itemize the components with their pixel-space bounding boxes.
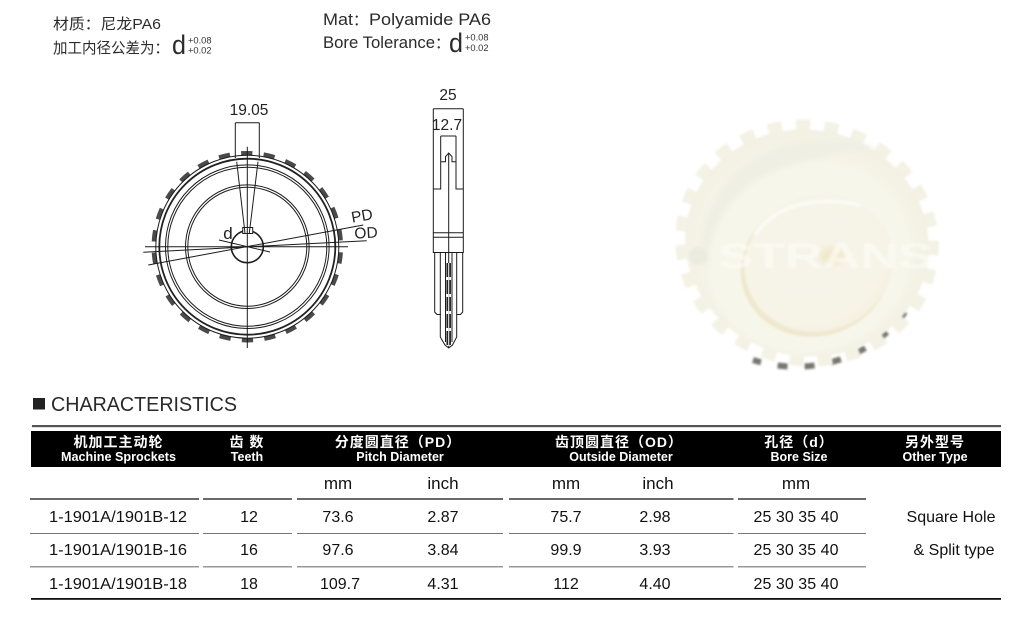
specification table — [30, 425, 1001, 600]
sprocket body with teeth — [661, 104, 953, 382]
column header: other type: 另外型号 — [905, 434, 965, 450]
other type note: Square Hole — [907, 509, 996, 526]
other type note: & Split type — [914, 542, 995, 559]
material note: Chinese — [53, 16, 212, 60]
column header: other type: Other Type — [902, 450, 968, 464]
row: 18 teeth: 112 — [553, 576, 579, 593]
column header: bore size — [764, 434, 834, 464]
row: 12 teeth: 73.6 — [322, 509, 354, 526]
center and diameter lines — [143, 147, 367, 348]
label: d: d — [223, 224, 233, 243]
material note: English: +0.08 — [465, 32, 489, 42]
column header: pitch diameter: 分度圆直径（PD） — [335, 434, 461, 450]
material note: Chinese: 加工内径公差为： — [53, 40, 169, 57]
column header: bore size: 孔径（d） — [764, 434, 834, 450]
column header: teeth — [230, 434, 264, 464]
row: 18 teeth: 25 30 35 40 — [754, 576, 839, 593]
label: OD: OD — [354, 224, 378, 243]
width dimension 25 — [433, 87, 463, 109]
material note: English: ： — [353, 12, 368, 29]
label: PD: PD — [350, 206, 374, 227]
product photo: white nylon sprocket — [661, 104, 953, 387]
hub highlight — [755, 201, 860, 235]
row: 18 teeth: 1-1901A/1901B-18 — [49, 576, 187, 593]
material note: English: +0.02 — [465, 43, 489, 53]
row: 16 teeth — [49, 542, 839, 559]
unit row: mm — [324, 474, 352, 493]
column header: machine sprockets: Machine Sprockets — [61, 450, 176, 464]
shadow under lower teeth — [753, 312, 905, 367]
pitch dimension 19.05: 19.05 — [230, 102, 268, 119]
upper shaded band — [700, 139, 880, 270]
material note: Chinese: d — [172, 30, 186, 60]
row: 12 teeth: 75.7 — [550, 509, 582, 526]
material note: English: ： — [435, 35, 450, 52]
column header: machine sprockets: 机加工主动轮 — [74, 434, 164, 450]
tooth chain — [446, 263, 451, 346]
row: 16 teeth: 3.84 — [427, 542, 459, 559]
column header: bore size: Bore Size — [771, 450, 828, 464]
sprocket teeth — [154, 153, 341, 340]
row: 18 teeth: 18 — [240, 576, 258, 593]
row: 16 teeth: 97.6 — [322, 542, 354, 559]
watermark — [689, 237, 933, 276]
row: 18 teeth: 4.40 — [639, 576, 671, 593]
material note: English: Polyamide PA6 — [369, 10, 491, 29]
row: 16 teeth: 16 — [240, 542, 258, 559]
raised ring — [677, 129, 943, 387]
width dimension 25: 25 — [439, 87, 457, 104]
side view drawing of sprocket — [432, 87, 463, 348]
material note: English: d — [449, 28, 463, 58]
watermark: STRANS — [718, 237, 933, 276]
column header: outside diameter: Outside Diameter — [569, 450, 673, 464]
width dimension 12.7: 12.7 — [432, 117, 462, 134]
row: 12 teeth: 2.98 — [639, 509, 671, 526]
row: 18 teeth: 109.7 — [320, 576, 360, 593]
material note: Chinese: +0.02 — [188, 46, 212, 56]
column header: machine sprockets — [61, 434, 176, 464]
row: 16 teeth: 99.9 — [550, 542, 582, 559]
row: 16 teeth: 1-1901A/1901B-16 — [49, 542, 187, 559]
material note: Chinese: +0.08 — [188, 36, 212, 46]
row: 12 teeth: 12 — [240, 509, 258, 526]
unit row: mm — [552, 474, 580, 493]
hub — [721, 173, 913, 358]
unit row: inch — [642, 474, 674, 493]
material note: Chinese: 材质：尼龙PA6 — [53, 16, 161, 33]
column header: pitch diameter — [335, 434, 461, 464]
material note: English: Mat — [323, 10, 353, 29]
row: 12 teeth: 1-1901A/1901B-12 — [49, 509, 187, 526]
row: 16 teeth: 25 30 35 40 — [754, 542, 839, 559]
row: 16 teeth: 3.93 — [639, 542, 671, 559]
row: 18 teeth — [49, 576, 839, 593]
table header band — [31, 431, 1001, 467]
column header: outside diameter: 齿顶圆直径（OD） — [555, 434, 683, 450]
column header: outside diameter — [555, 434, 683, 464]
unit row: inch — [427, 474, 459, 493]
column header: teeth: Teeth — [231, 450, 263, 464]
unit row: mm — [782, 474, 810, 493]
row: 18 teeth: 4.31 — [427, 576, 459, 593]
pitch dimension 19.05 — [230, 102, 268, 233]
column header: teeth: 齿 数 — [230, 434, 264, 450]
row: 12 teeth: 25 30 35 40 — [754, 509, 839, 526]
bore and keyway — [231, 231, 263, 263]
column header: other type — [902, 434, 968, 464]
material note: English: Bore Tolerance — [323, 33, 435, 52]
section heading: characteristics: CHARACTERISTICS — [51, 394, 237, 416]
column header: pitch diameter: Pitch Diameter — [356, 450, 444, 464]
other type note — [907, 509, 996, 559]
row: 12 teeth: 2.87 — [427, 509, 459, 526]
unit row — [324, 474, 810, 493]
bore shading — [819, 247, 845, 265]
front view drawing of sprocket — [143, 102, 378, 348]
row: 12 teeth — [49, 509, 839, 526]
material note: English — [323, 10, 491, 58]
